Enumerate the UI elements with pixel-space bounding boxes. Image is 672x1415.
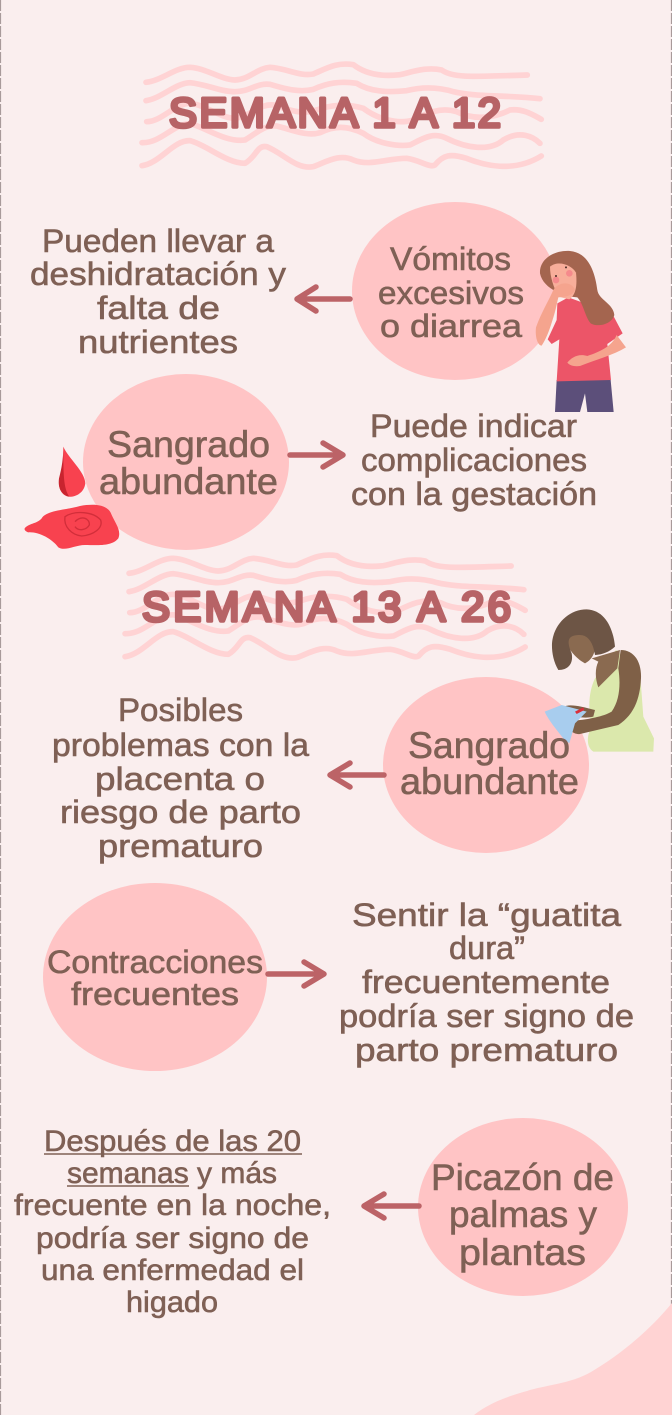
text: después de las 20 semanas: semanas y más bbox=[67, 1157, 277, 1190]
icon: woman feeling sick bbox=[536, 251, 626, 412]
text: después de las 20 semanas: podría ser signo de bbox=[36, 1222, 309, 1255]
label: vómitos excesivos o diarrea: o diarrea bbox=[380, 308, 522, 344]
label: picazón de palmas y plantas: Picazón de bbox=[431, 1157, 614, 1198]
text: deshidratación bbox=[30, 223, 286, 360]
label: picazón de palmas y plantas bbox=[431, 1157, 614, 1273]
text: después de las 20 semanas: higado bbox=[126, 1286, 218, 1319]
label: sangrado abundante: Sangrado bbox=[408, 725, 570, 766]
text: guatita dura: Sentir la “guatita bbox=[352, 897, 621, 933]
label: contracciones frecuentes bbox=[47, 944, 263, 1012]
arrow: to dehydration bbox=[297, 287, 350, 311]
arrow: to placenta bbox=[330, 763, 384, 787]
text: placenta: Posibles bbox=[118, 692, 243, 728]
text: guatita dura: frecuentemente bbox=[362, 964, 610, 1000]
text: después de las 20 semanas: una enfermedad el bbox=[41, 1254, 304, 1287]
circle: vómitos bbox=[352, 202, 558, 380]
arrow: to itching note bbox=[364, 1194, 419, 1218]
circle: sangrado bbox=[83, 374, 289, 550]
text: guatita dura bbox=[339, 897, 634, 1068]
circle: contracciones bbox=[43, 883, 267, 1071]
text: guatita dura: podría ser signo de bbox=[339, 998, 634, 1034]
panel: sangrado abundante 1 bbox=[25, 374, 597, 550]
title: semana 13 a 26: SEMANA 13 A 26 bbox=[142, 583, 511, 630]
text: complicaciones: Puede indicar bbox=[370, 408, 577, 444]
label: contracciones frecuentes: frecuentes bbox=[71, 976, 239, 1012]
text: después de las 20 semanas bbox=[14, 1125, 331, 1319]
text: guatita dura: parto prematuro bbox=[355, 1032, 618, 1068]
icon: blood drop and puddle bbox=[25, 447, 119, 549]
arrow: to complications bbox=[290, 443, 343, 467]
text: placenta: riesgo de parto bbox=[60, 794, 301, 830]
label: sangrado abundante bbox=[99, 424, 278, 502]
text: deshidratación: deshidratación y bbox=[30, 256, 286, 292]
label: sangrado abundante: Sangrado bbox=[107, 424, 270, 465]
text: deshidratación: nutrientes bbox=[78, 324, 238, 360]
text: complicaciones: con la gestación bbox=[351, 476, 597, 512]
text: deshidratación: falta de bbox=[97, 290, 220, 326]
label: vómitos excesivos o diarrea: Vómitos bbox=[390, 241, 511, 277]
label: sangrado abundante: abundante bbox=[99, 461, 278, 502]
label: vómitos excesivos o diarrea bbox=[378, 241, 524, 344]
arrow: to guatita dura bbox=[268, 962, 324, 986]
panel: vómitos excesivos bbox=[30, 202, 626, 412]
panel: semana 13 a 26 heading bbox=[125, 555, 525, 658]
text: placenta: placenta o bbox=[95, 761, 265, 797]
corner decoration: bottom right blob bbox=[474, 1303, 672, 1415]
panel: contracciones bbox=[43, 883, 634, 1071]
text: deshidratación: Pueden llevar a bbox=[42, 223, 274, 259]
text: complicaciones: complicaciones bbox=[361, 442, 587, 478]
panel: picazón bbox=[14, 1118, 628, 1319]
decoration: wavy lines behind heading 2 bbox=[125, 555, 525, 658]
decoration: wavy lines behind heading 1 bbox=[142, 64, 541, 167]
text: después de las 20 semanas: Después de las 20 bbox=[44, 1125, 301, 1158]
circle: picazón bbox=[418, 1118, 628, 1296]
label: vómitos excesivos o diarrea: excesivos bbox=[378, 275, 524, 311]
text: placenta bbox=[52, 692, 309, 864]
panel: sangrado abundante 2 bbox=[52, 609, 654, 864]
label: picazón de palmas y plantas: plantas bbox=[459, 1232, 586, 1273]
title: semana 1 a 12: SEMANA 1 A 12 bbox=[169, 89, 501, 136]
text: placenta: prematuro bbox=[98, 828, 263, 864]
text: después de las 20 semanas: frecuente en la noche, bbox=[14, 1189, 331, 1222]
label: sangrado abundante bbox=[400, 725, 579, 802]
icon: pregnant woman with stained cloth bbox=[545, 609, 654, 752]
label: picazón de palmas y plantas: palmas y bbox=[449, 1194, 597, 1235]
label: sangrado abundante: abundante bbox=[400, 761, 579, 802]
text: placenta: problemas con la bbox=[52, 727, 309, 763]
text: complicaciones bbox=[351, 408, 597, 512]
text: guatita dura: dura” bbox=[449, 930, 525, 966]
circle: sangrado 2 bbox=[383, 677, 589, 853]
label: contracciones frecuentes: Contracciones bbox=[47, 944, 263, 980]
panel: semana 1 a 12 heading bbox=[142, 64, 541, 167]
